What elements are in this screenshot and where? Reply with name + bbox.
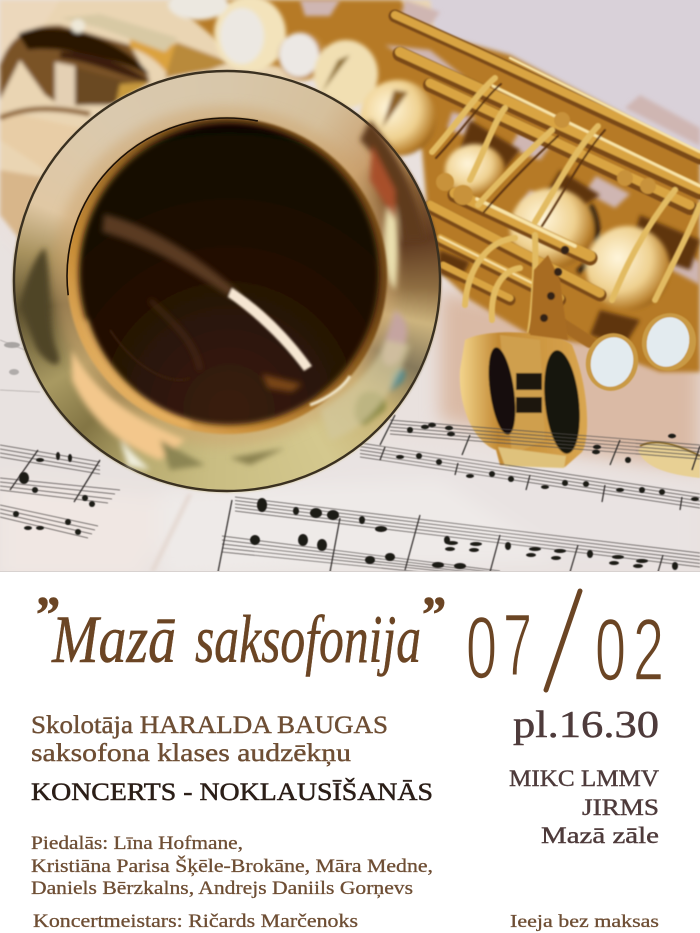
- title: Mazā saksofonija: ”: [419, 587, 445, 644]
- title: Mazā saksofonija: saksofonija: [195, 601, 421, 677]
- bell outer ring: [13, 70, 441, 492]
- gold inner rim: [67, 118, 387, 434]
- accompanist: Koncertmeistars: Ričards Marčenoks: [33, 912, 358, 932]
- date: 07 / 02: 0: [595, 600, 626, 699]
- title: Mazā saksofonija: [33, 587, 445, 677]
- key arms: [432, 78, 700, 332]
- performers: Piedalās: Līna Hofmane,: [31, 834, 243, 854]
- date: 07 / 02: [466, 591, 664, 699]
- teacher line: saksofona klases audzēkņu: [31, 740, 352, 767]
- interior reflections: [85, 214, 350, 425]
- book fold shadow: [150, 494, 192, 572]
- title: Mazā saksofonija: Mazā: [51, 601, 176, 677]
- date: 07 / 02: 0: [466, 598, 497, 697]
- venue: JIRMS: [582, 795, 659, 820]
- venue: Mazā zāle: [541, 823, 659, 848]
- venue: [509, 766, 659, 848]
- bell mouth and interior: [0, 70, 700, 572]
- performers: [31, 834, 433, 899]
- tan band around the mouth: [52, 106, 396, 446]
- dark interior: [79, 123, 379, 425]
- notes: [4, 342, 699, 570]
- time: pl.16.30: [513, 704, 659, 746]
- date: 07 / 02: 7: [503, 595, 532, 694]
- photo: saxophone on sheet music: [0, 0, 700, 572]
- date: 07 / 02: 2: [633, 600, 664, 699]
- pearl keys: [579, 307, 700, 478]
- venue: MIKC LMMV: [509, 766, 659, 791]
- lavender and pink gaps between keys: [300, 0, 700, 285]
- performers: Kristiāna Parisa Šķēle-Brokāne, Māra Medne,: [31, 855, 433, 877]
- sheet music staves: [0, 340, 700, 572]
- dark shadows inside key cluster: [436, 120, 700, 345]
- photo background: paper, keys and rods: [0, 0, 700, 571]
- title: Mazā saksofonija: ”: [33, 587, 59, 644]
- bell outline: [14, 71, 440, 491]
- key cluster mass: [170, 0, 700, 372]
- large palm key with black pads: [460, 246, 587, 468]
- photo bottom edge: [0, 571, 700, 572]
- paper tones: [0, 220, 700, 590]
- admission: Ieeja bez maksas: [510, 911, 659, 931]
- ring reflections: [20, 120, 425, 470]
- dark curved key top-left: [0, 25, 150, 105]
- rods: [395, 15, 700, 342]
- teacher line: Skolotāja HARALDA BAUGAS: [31, 712, 388, 739]
- top key cups: [168, 0, 670, 310]
- concert heading: KONCERTS - NOKLAUSĪŠANĀS: [31, 777, 433, 806]
- teacher line: [31, 712, 388, 767]
- saxophone body top-left: [0, 0, 440, 250]
- performers: Daniels Bērzkalns, Andrejs Daniils Gorņevs: [31, 879, 413, 899]
- lavender backdrop: [330, 0, 700, 170]
